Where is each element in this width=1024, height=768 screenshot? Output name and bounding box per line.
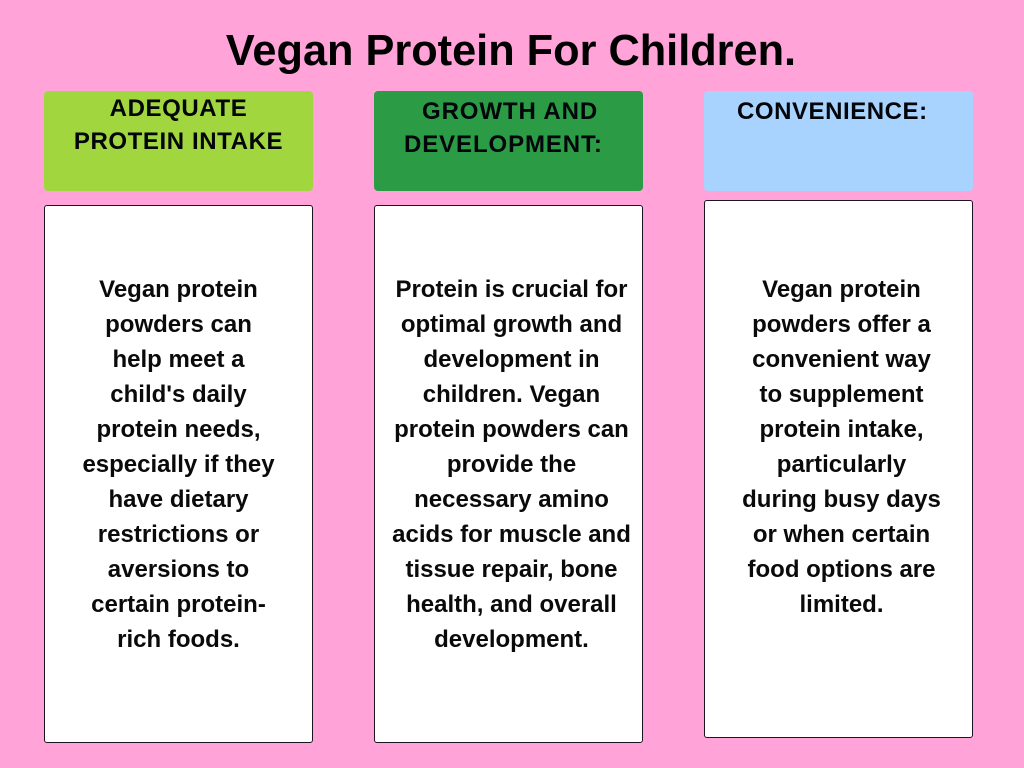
heading text: growth and development: DEVELOPMENT: (404, 131, 603, 158)
text block: growth and development description: optimal growth and (401, 311, 622, 338)
text block: growth and development description: tissue repair, bone (405, 556, 618, 583)
title: Vegan Protein For Children. (226, 27, 796, 75)
text block: adequate protein intake description: aversions to (108, 556, 249, 583)
panel: convenience body (704, 200, 973, 738)
text block: adequate protein intake description: restrictions or (98, 521, 259, 548)
text block: adequate protein intake description (82, 276, 275, 653)
text block: convenience description (742, 276, 941, 618)
text block: convenience description: convenient way (752, 346, 931, 373)
text block: growth and development description: children. Vegan (423, 381, 600, 408)
text block: growth and development description: Protein is crucial for (395, 276, 628, 303)
text block: growth and development description: necessary amino (414, 486, 609, 513)
text block: adequate protein intake description: powders can (105, 311, 252, 338)
text block: adequate protein intake description: certain protein- (91, 591, 266, 618)
text block: adequate protein intake description: have dietary (108, 486, 249, 513)
heading text: adequate protein intake: PROTEIN INTAKE (74, 128, 283, 155)
heading text: adequate protein intake: ADEQUATE (110, 95, 247, 122)
text block: convenience description: during busy days (742, 486, 941, 513)
text block: growth and development description (392, 276, 631, 653)
heading text: adequate protein intake (74, 95, 283, 155)
text block: convenience description: protein intake, (759, 416, 924, 443)
text block: growth and development description: acids for muscle and (392, 521, 631, 548)
text block: adequate protein intake description: rich foods. (117, 626, 240, 653)
text block: adequate protein intake description: Vegan protein (99, 276, 258, 303)
text block: growth and development description: protein powders can (394, 416, 629, 443)
text block: adequate protein intake description: protein needs, (96, 416, 261, 443)
text block: growth and development description: development in (423, 346, 600, 373)
heading text: growth and development: GROWTH AND (422, 98, 598, 125)
text block: convenience description: food options are (748, 556, 936, 583)
text block: convenience description: Vegan protein (762, 276, 921, 303)
panel: adequate protein intake heading (44, 91, 313, 191)
panel: growth and development body (374, 205, 643, 743)
heading text: growth and development (404, 98, 603, 158)
text block: growth and development description: provide the (447, 451, 576, 478)
panel: convenience heading (704, 91, 973, 191)
text block: convenience description: particularly (777, 451, 906, 478)
text block: adequate protein intake description: child's daily (110, 381, 247, 408)
text block: convenience description: powders offer a (752, 311, 931, 338)
text block: convenience description: or when certain (753, 521, 930, 548)
text block: convenience description: to supplement (759, 381, 924, 408)
text block: adequate protein intake description: especially if they (82, 451, 275, 478)
text block: convenience description: limited. (799, 591, 884, 618)
panel: growth and development heading (374, 91, 643, 191)
text block: growth and development description: development. (434, 626, 589, 653)
panel: adequate protein intake body (44, 205, 313, 743)
heading text: convenience: CONVENIENCE: (737, 98, 928, 125)
text block: adequate protein intake description: help meet a (112, 346, 245, 373)
text block: growth and development description: health, and overall (406, 591, 617, 618)
